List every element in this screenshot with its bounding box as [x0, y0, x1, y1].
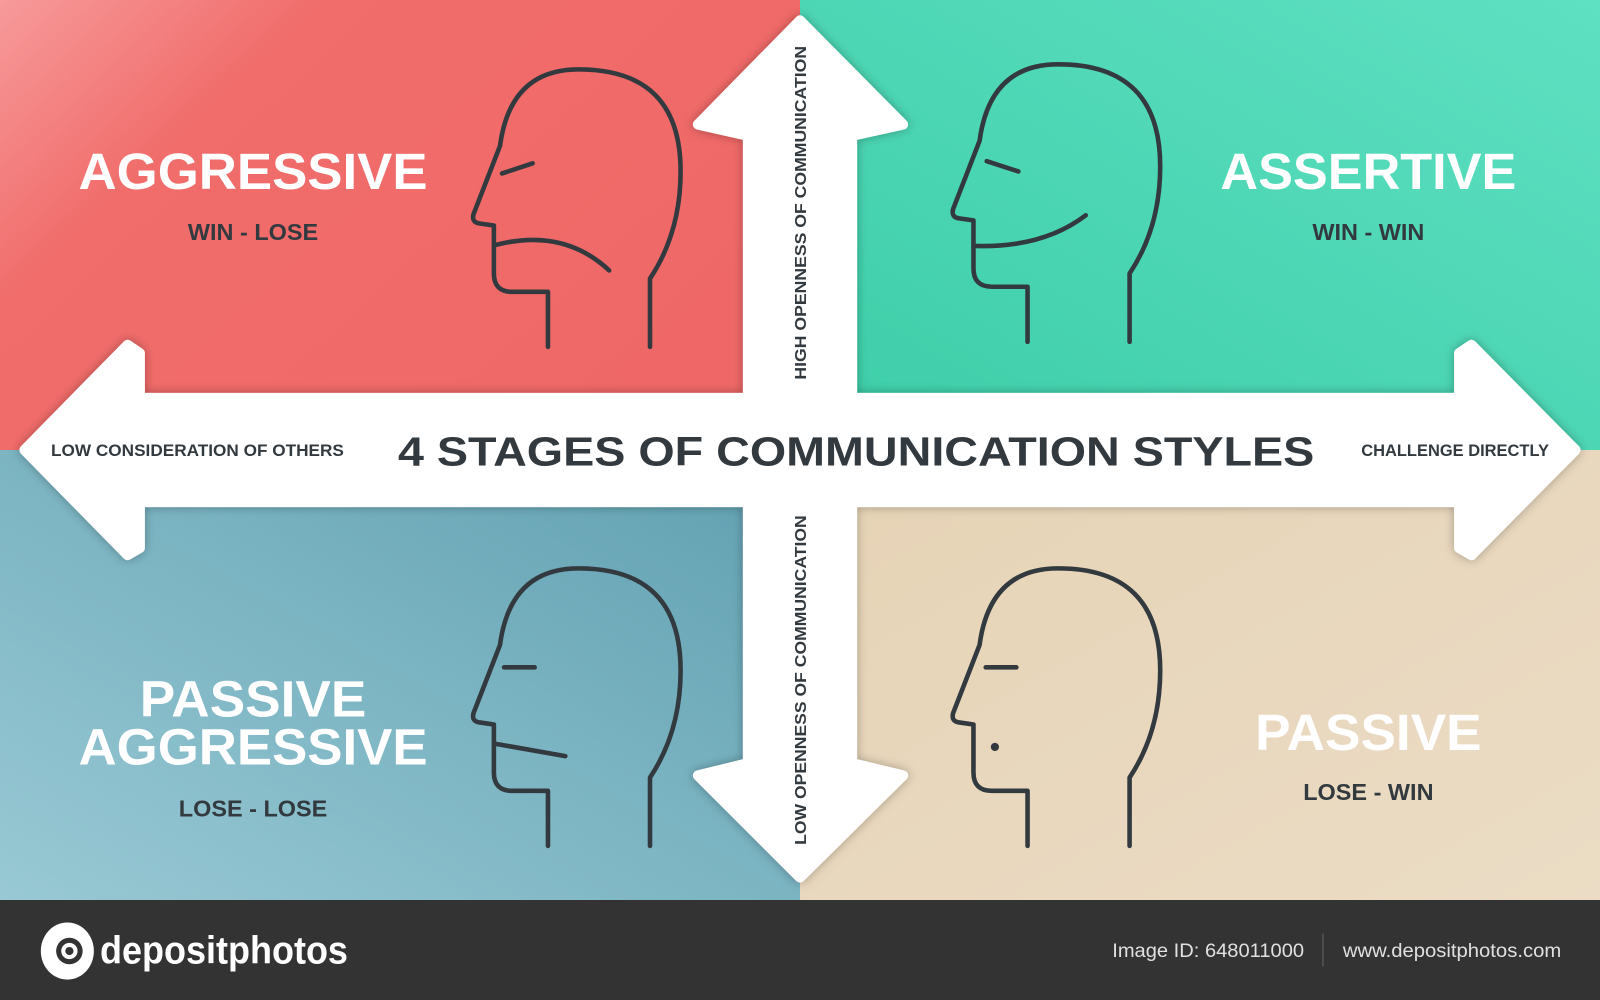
label: passive aggressive: AGGRESSIVE [79, 718, 428, 775]
axis label: top: HIGH OPENNESS OF COMMUNICATION [793, 46, 810, 380]
label: passive [1255, 704, 1482, 805]
label: passive aggressive: PASSIVE [140, 670, 366, 727]
axis label: right: CHALLENGE DIRECTLY [1361, 442, 1549, 460]
icon: logo camera [41, 922, 94, 980]
axis label: bottom: LOW OPENNESS OF COMMUNICATION [793, 515, 810, 845]
icon: aggressive head [473, 69, 681, 347]
icon: passive head [953, 568, 1160, 846]
footer bar [0, 900, 1600, 1000]
panel: passive quadrant [800, 450, 1600, 900]
panel: assertive quadrant [800, 0, 1600, 450]
label: aggressive: WIN - LOSE [188, 219, 318, 245]
label: assertive [1220, 143, 1516, 245]
label: assertive: ASSERTIVE [1220, 143, 1516, 200]
label: assertive: WIN - WIN [1312, 219, 1424, 245]
label: aggressive: AGGRESSIVE [79, 143, 428, 200]
label: passive: LOSE - WIN [1303, 779, 1434, 805]
label: passive aggressive: LOSE - LOSE [179, 795, 327, 821]
icon: passive aggressive head [473, 568, 681, 846]
label: passive aggressive [79, 670, 428, 821]
footer bar: depositphotos [100, 929, 348, 972]
footer bar: Image ID: 648011000 [1112, 940, 1304, 962]
title: 4 STAGES OF COMMUNICATION STYLES [398, 428, 1314, 474]
axis label: left: LOW CONSIDERATION OF OTHERS [51, 442, 344, 460]
label: passive: PASSIVE [1255, 704, 1482, 761]
panel: aggressive quadrant [0, 0, 800, 450]
icon: assertive head [953, 64, 1160, 342]
panel: passive aggressive quadrant [0, 450, 800, 900]
label: aggressive [79, 143, 428, 245]
footer bar: www.depositphotos.com [1342, 940, 1561, 962]
